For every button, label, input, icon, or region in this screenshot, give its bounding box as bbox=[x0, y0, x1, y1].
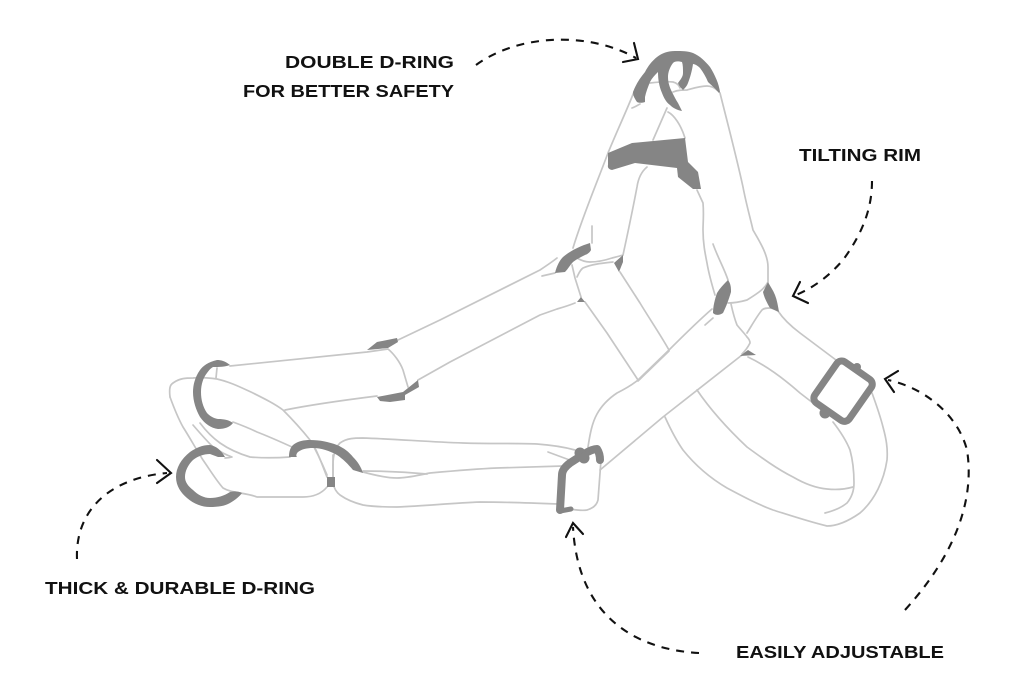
chest plate bbox=[608, 138, 701, 189]
small hardware: tilting rim and sliders bbox=[327, 243, 779, 487]
adjustable buckle bbox=[560, 448, 600, 511]
thick D-ring bbox=[176, 445, 242, 507]
arrow: thick d-ring bbox=[77, 460, 171, 559]
label: double d-ring bbox=[243, 52, 454, 101]
label: double d-ring: DOUBLE D-RING bbox=[285, 52, 454, 72]
harness outline: left loops bbox=[170, 378, 333, 497]
arrow: right buckle bbox=[885, 371, 969, 610]
arrow: easily adjustable bbox=[566, 523, 699, 653]
arrow: double d-ring bbox=[476, 40, 638, 65]
harness outline: upper left strap bbox=[216, 258, 575, 410]
harness outline: lower strap bbox=[333, 438, 575, 507]
label: thick and durable d-ring: THICK & DURABLE D-RING bbox=[45, 578, 315, 598]
harness outline: chest triangle straps bbox=[572, 82, 768, 380]
label: tilting rim: TILTING RIM bbox=[799, 145, 921, 165]
double D-ring bbox=[633, 51, 720, 111]
right buckle bbox=[812, 359, 875, 424]
upper left ring bbox=[193, 360, 233, 429]
label: double d-ring: FOR BETTER SAFETY bbox=[243, 81, 454, 101]
harness outline: crossing straps bbox=[570, 304, 887, 526]
illustration: dog harness bbox=[170, 51, 887, 526]
arrow: tilting rim bbox=[793, 181, 872, 303]
label: easily adjustable: EASILY ADJUSTABLE bbox=[736, 642, 944, 662]
middle ring bbox=[289, 440, 363, 473]
